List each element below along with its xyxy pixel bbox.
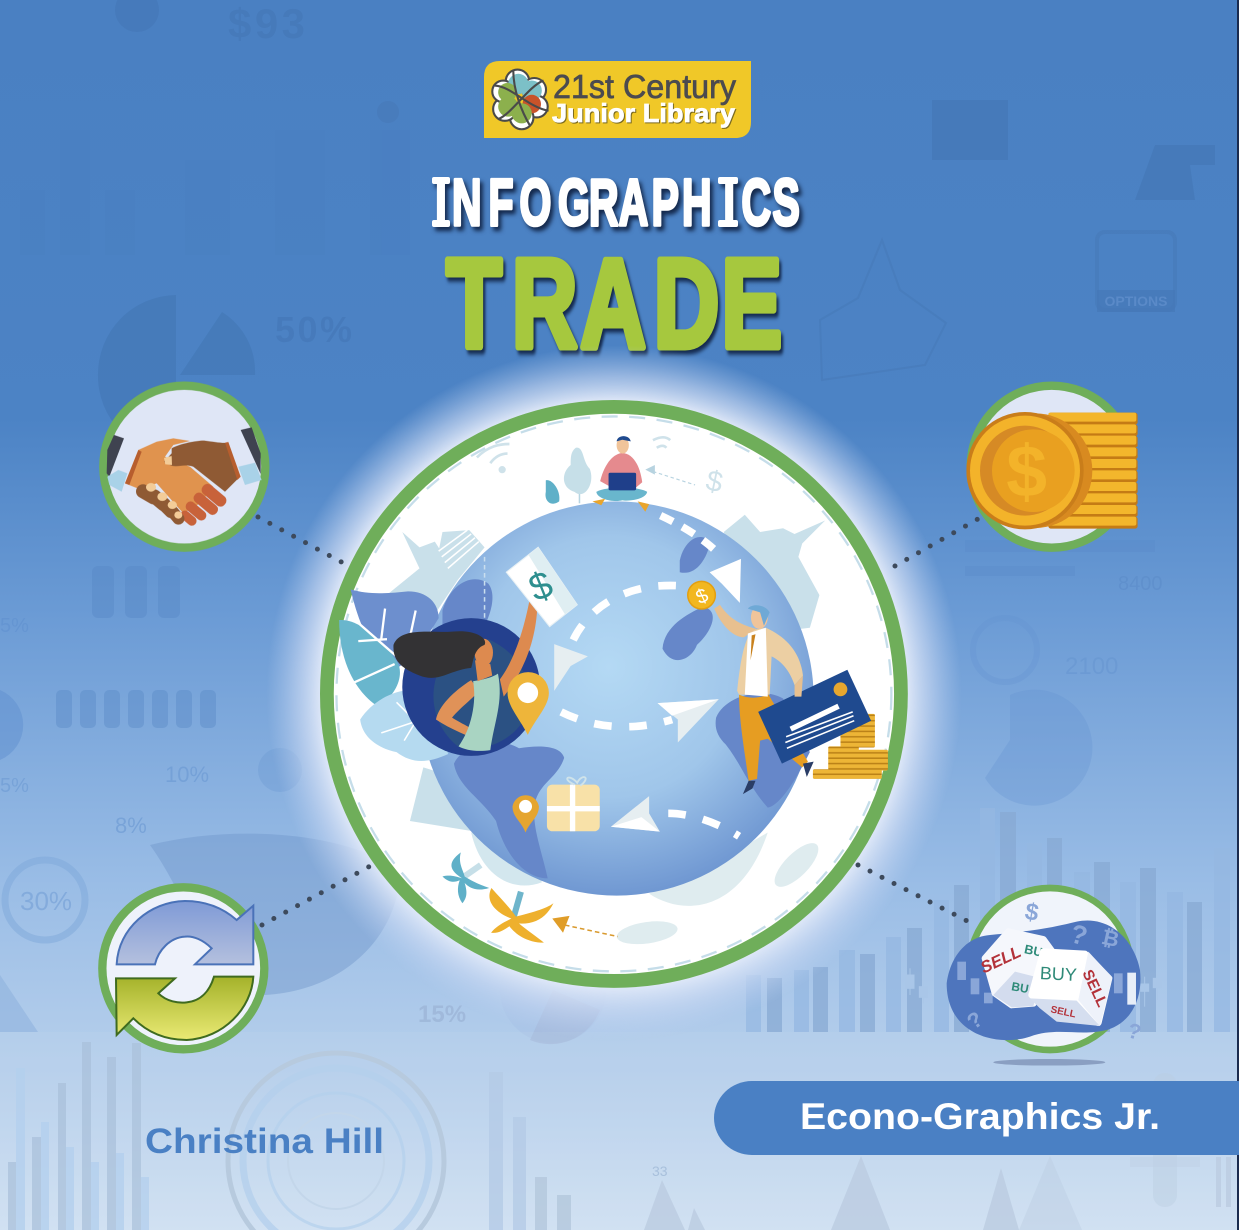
glow around globe	[266, 345, 962, 1041]
series banner: Econo-Graphics Jr.	[800, 1096, 1160, 1137]
faded background charts: OPTIONS	[1104, 293, 1168, 309]
faded background charts: 50%	[275, 309, 352, 350]
wifi and dollar icons: $	[703, 465, 725, 499]
leaves	[339, 589, 448, 761]
faint bars bottom left	[8, 1042, 571, 1230]
credit card	[758, 670, 871, 764]
blob icons: ₿	[1099, 925, 1121, 952]
map pin small	[512, 795, 539, 832]
badge: coins: $	[1006, 431, 1047, 513]
coin in hand: $	[693, 584, 712, 609]
small trees	[545, 448, 591, 504]
author name: Christina Hill	[145, 1122, 384, 1161]
faded background charts: 5%	[0, 775, 29, 797]
blob icons	[957, 898, 1144, 1045]
logo: 21st Century Junior Library: 21st Century	[553, 68, 736, 105]
woman	[393, 595, 540, 756]
badge: exchange arrows	[102, 887, 264, 1049]
faded background charts: 2100	[1065, 653, 1118, 680]
badge: buy and sell dice	[906, 888, 1161, 1066]
icon: flower	[492, 70, 549, 129]
die right: SELL	[1079, 967, 1111, 1010]
die left: BU	[1023, 942, 1044, 960]
dashed orbit	[336, 416, 891, 971]
gift box	[547, 777, 600, 831]
blob icons: ?	[962, 1006, 988, 1034]
shadow	[993, 1059, 1105, 1066]
faded background charts: 30%	[20, 886, 72, 916]
faded background charts: $93	[228, 0, 305, 47]
city skyline left	[389, 530, 485, 614]
die right: SELL	[1050, 1004, 1077, 1021]
ground shapes	[410, 767, 481, 832]
skyline right	[724, 515, 825, 630]
faint triangles	[644, 1073, 1231, 1230]
wifi and dollar icons	[477, 437, 725, 499]
die right: BUY	[1039, 963, 1077, 985]
man with credit card	[714, 605, 888, 794]
banknote	[506, 547, 577, 627]
coin stacks	[813, 714, 888, 779]
green ring	[327, 407, 901, 981]
blue blob	[947, 920, 1140, 1040]
coin in hand	[688, 581, 715, 609]
person with laptop	[592, 436, 649, 512]
die left	[977, 932, 1054, 1007]
badge: handshake	[103, 386, 265, 548]
map pin large	[508, 672, 549, 735]
candlesticks	[906, 968, 1161, 1007]
faded background charts: 15%	[418, 1001, 466, 1028]
coin stack	[1048, 413, 1138, 529]
faded background charts: 10%	[165, 762, 209, 787]
blob icons: ?	[1125, 1018, 1144, 1045]
blob icons: $	[1023, 898, 1041, 927]
series banner	[714, 1081, 1239, 1155]
badge: coins	[966, 386, 1138, 548]
paper planes	[554, 559, 741, 832]
dotted connectors	[258, 515, 985, 925]
faint bar chart right	[746, 808, 1230, 1032]
palm trees	[442, 852, 618, 943]
logo: 21st Century Junior Library: Junior Library	[552, 98, 736, 128]
logo: 21st Century Junior Library	[484, 61, 751, 138]
dark right edge	[1237, 0, 1239, 1230]
faded background charts: 5%	[0, 615, 29, 637]
die right	[1030, 952, 1112, 1026]
die left: BU	[1010, 979, 1030, 996]
central globe illustration	[327, 407, 901, 981]
globe	[420, 501, 814, 896]
faded background charts: 8%	[115, 813, 147, 838]
faded background charts: 8400	[1118, 573, 1162, 595]
title: Trade: TRADE	[446, 235, 782, 375]
concentric rings	[228, 1053, 444, 1230]
banknote: $	[523, 563, 559, 611]
die left: SELL	[977, 942, 1024, 977]
title: Infographics: INFOGRAPHICS	[435, 165, 800, 239]
faded background charts: 33	[652, 1163, 668, 1179]
continents	[442, 537, 810, 878]
dashed trade routes	[561, 516, 739, 836]
blob icons: ?	[1067, 918, 1091, 952]
